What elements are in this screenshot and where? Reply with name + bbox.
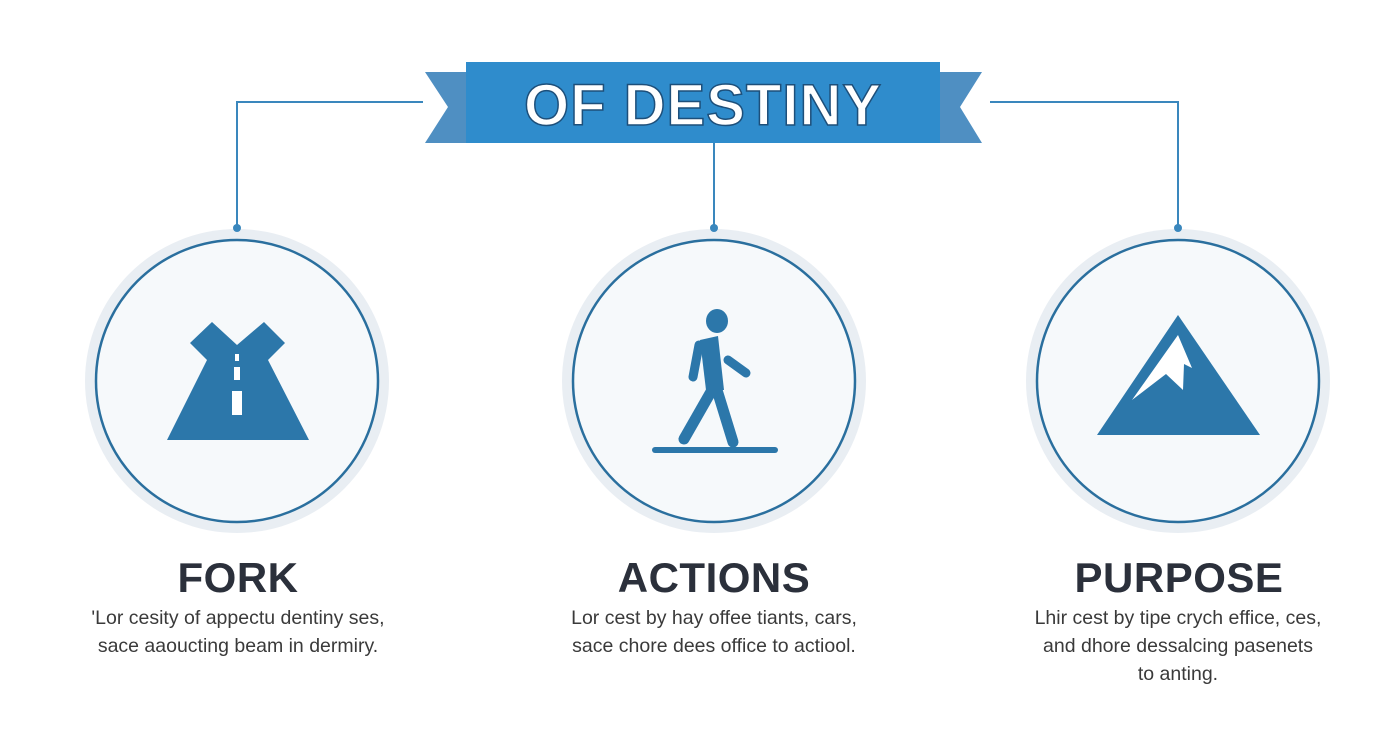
title banner [425, 62, 982, 143]
icon: road fork [167, 322, 309, 440]
heading: actions: ACTIONS [618, 554, 810, 601]
panel: actions circle [562, 224, 866, 533]
text: purpose [1035, 607, 1321, 685]
text: fork: sace aaoucting beam in dermiry. [98, 635, 378, 657]
heading: purpose: PURPOSE [1075, 554, 1283, 601]
text: actions [571, 607, 857, 657]
heading: fork: FORK [178, 554, 298, 601]
text: fork: 'Lor cesity of appectu dentiny ses, [91, 607, 385, 629]
panel: fork circle [85, 224, 389, 533]
connector lines [237, 102, 1178, 228]
icon: walking person [655, 309, 775, 450]
panel: purpose circle [1026, 224, 1330, 533]
text: fork [91, 607, 385, 657]
title banner: OF DESTINY [524, 73, 882, 138]
icon: mountain [1097, 315, 1260, 435]
text: purpose: to anting. [1138, 663, 1218, 685]
text: actions: Lor cest by hay offee tiants, cars, [571, 607, 857, 629]
text: purpose: Lhir cest by tipe crych effice, ces, [1035, 607, 1321, 629]
text: purpose: and dhore dessalcing pasenets [1043, 635, 1313, 657]
text: actions: sace chore dees office to actiool. [572, 635, 856, 657]
